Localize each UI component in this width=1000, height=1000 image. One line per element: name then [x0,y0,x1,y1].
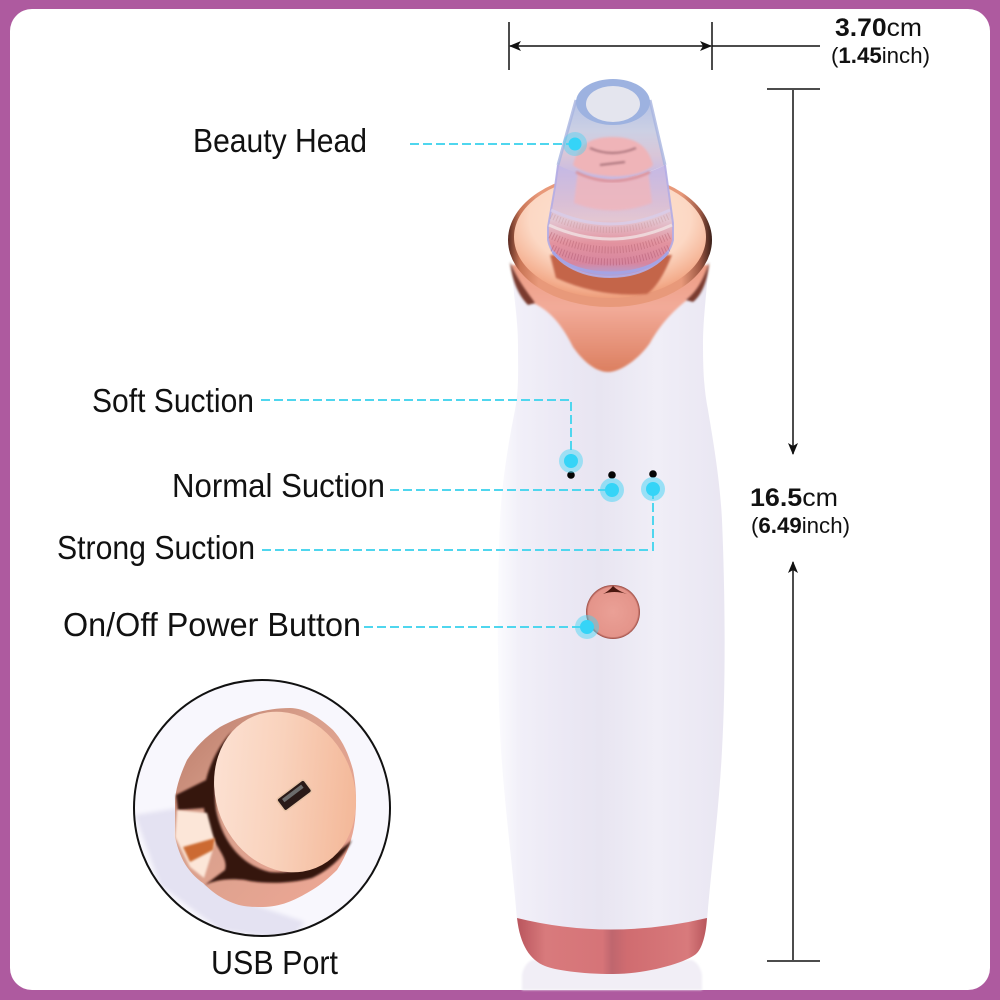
height measurement: 16.5cm [750,484,838,512]
width measurement: (1.45inch) [831,43,930,68]
indicator dots [567,470,657,479]
USB port inset [134,680,390,940]
device barrel [135,808,305,940]
width measurement [831,14,930,68]
beauty head [548,79,673,277]
dark reflection crescent [176,731,352,885]
power button [586,585,640,639]
rose gold rim [508,173,712,307]
inner nozzle [574,170,652,210]
end cap face [214,712,356,872]
height dimension arrows [767,89,820,961]
label: On/Off Power Button: On/Off Power Button [63,606,361,643]
cap ribs [549,210,672,273]
base reflection [522,960,702,990]
product: blackhead device [498,79,725,990]
upper cone [558,100,665,178]
beauty head reflection in rim [550,255,672,295]
lower cap [548,163,673,277]
nozzle opening [576,79,650,125]
rose gold base [517,918,707,974]
label: Soft Suction: Soft Suction [92,382,254,419]
label: USB Port: USB Port [211,944,338,981]
micro USB socket [276,779,312,812]
end shell [175,708,356,907]
width dimension arrow [509,22,820,70]
width measurement: 3.70cm [835,14,922,42]
rim underside and tongue [511,265,709,372]
callout lines [261,144,653,627]
label: Beauty Head: Beauty Head [193,122,367,159]
label: Strong Suction: Strong Suction [57,529,255,566]
device body [498,270,725,931]
pink inner dome [573,137,653,176]
bright left reflection [175,810,215,878]
height measurement [750,484,850,538]
callout markers [559,132,665,639]
height measurement: (6.49inch) [751,513,850,538]
label: Normal Suction: Normal Suction [172,467,385,504]
